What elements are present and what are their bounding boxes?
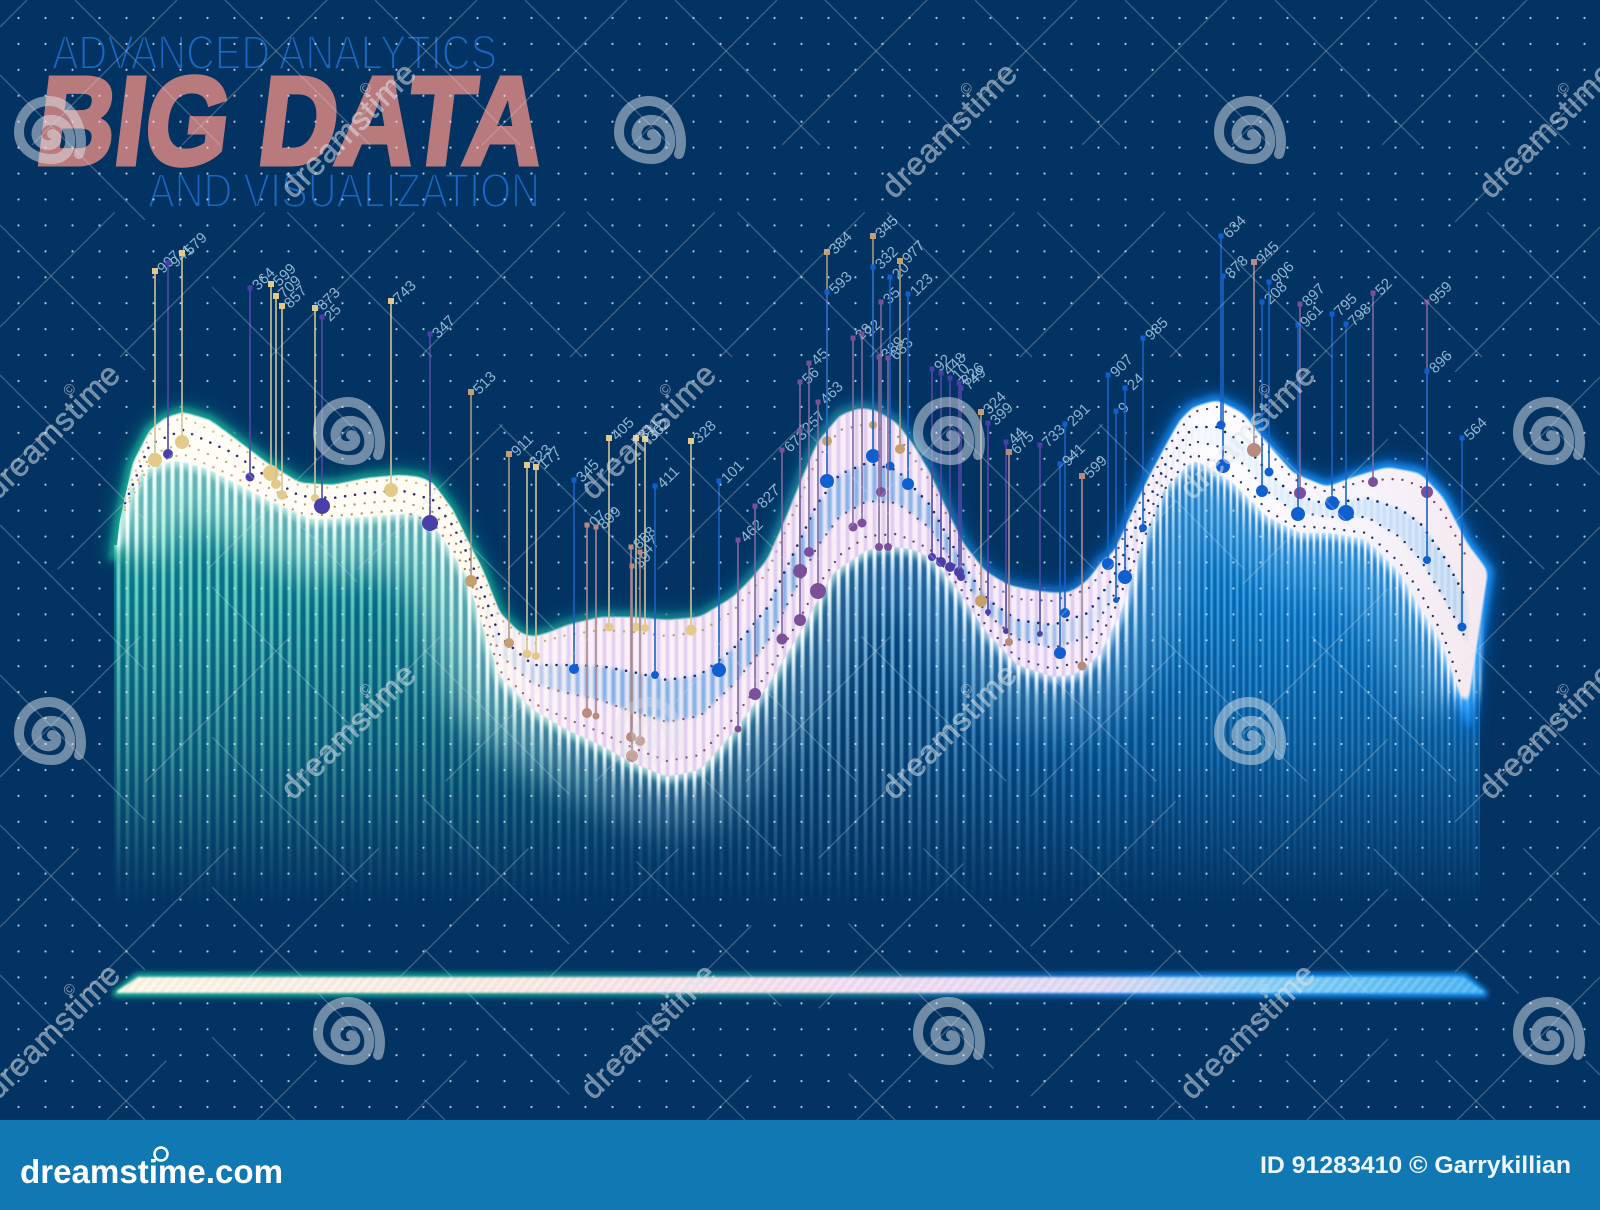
pin 899 xyxy=(592,503,625,720)
pin 985: 985 xyxy=(1142,314,1172,344)
pin 389: 389 xyxy=(878,333,908,363)
pin 873 xyxy=(311,284,344,502)
pin 906: 906 xyxy=(1268,258,1298,288)
pin 448 xyxy=(936,349,970,567)
pin 92: 92 xyxy=(931,351,955,375)
pin 92 xyxy=(928,351,955,561)
pin 35 xyxy=(876,284,904,497)
pin 941 lower: 941 xyxy=(1059,440,1089,470)
spiral xyxy=(1219,702,1281,760)
pin 579: 579 xyxy=(181,229,211,259)
pin 997 xyxy=(148,247,184,467)
pin 897: 897 xyxy=(1299,280,1329,310)
pin 291 xyxy=(1060,400,1094,618)
pin 24: 24 xyxy=(1124,370,1148,394)
pin 364 xyxy=(246,264,279,482)
pin 44 xyxy=(1003,424,1029,634)
pin 07 xyxy=(582,507,610,718)
pin 945: 945 xyxy=(1253,238,1283,268)
pin 743: 743 xyxy=(390,277,420,307)
pin 906 xyxy=(1264,258,1298,476)
pin 123: 123 xyxy=(907,270,937,300)
pin 448: 448 xyxy=(940,349,970,379)
pin 405: 405 xyxy=(608,414,638,444)
pin 302 xyxy=(641,415,674,632)
pin 513: 513 xyxy=(470,368,500,398)
pin 795: 795 xyxy=(1331,290,1361,320)
pin 749: 749 xyxy=(960,364,990,394)
pin 961: 961 xyxy=(1297,301,1327,331)
pin 20: 20 xyxy=(889,259,913,283)
bar chart: striped area under the curve xyxy=(114,466,1480,892)
pin 384: 384 xyxy=(826,228,856,258)
wordmark: dreamstime xyxy=(573,356,723,506)
pin 311 xyxy=(632,415,664,632)
pin 10: 10 xyxy=(949,360,973,384)
pin 07: 07 xyxy=(586,507,610,531)
pin 45: 45 xyxy=(808,345,832,369)
wordmark: © xyxy=(957,680,977,700)
pin 328: 328 xyxy=(690,417,720,447)
pin 593 xyxy=(820,268,856,488)
pin 208: 208 xyxy=(1261,278,1291,308)
pin 411 xyxy=(651,463,683,679)
pin 599 lower: 599 xyxy=(1081,452,1111,482)
pin 389 xyxy=(875,333,908,551)
pin 941 lower xyxy=(1054,440,1089,659)
wordmark: © xyxy=(1255,980,1275,1000)
spiral xyxy=(619,702,681,760)
spiral xyxy=(318,402,380,460)
pin 743 xyxy=(384,277,420,497)
wordmark: © xyxy=(356,680,376,700)
title line: advanced analytics: ADVANCED ANALYTICS xyxy=(52,27,497,80)
watermark spirals xyxy=(19,101,1580,1060)
spiral xyxy=(1518,402,1580,460)
dotted series 4 xyxy=(125,454,1462,761)
wordmark: dreamstime xyxy=(273,55,423,205)
pin 675 xyxy=(1005,428,1038,646)
pin 291: 291 xyxy=(1064,400,1094,430)
pin 941 xyxy=(163,241,197,459)
pin 44: 44 xyxy=(1005,424,1029,448)
pin 177: 177 xyxy=(535,443,565,473)
wordmark: © xyxy=(656,380,676,400)
spiral xyxy=(1219,101,1281,159)
pin 411: 411 xyxy=(654,463,683,492)
pin 345: 345 xyxy=(573,456,603,486)
pin 945 xyxy=(1247,238,1283,457)
pin 384 xyxy=(822,228,856,446)
pin 47 xyxy=(635,534,663,746)
pin 564 xyxy=(1458,414,1491,632)
pin 513 xyxy=(465,368,500,587)
pin 599 lower xyxy=(1078,452,1111,670)
pin 257: 257 xyxy=(799,407,829,437)
pin 345 xyxy=(569,456,603,674)
curve band: glowing ribbon with dotted series xyxy=(114,390,1488,790)
wordmark: © xyxy=(1554,79,1574,99)
pin 123 xyxy=(902,270,937,490)
dotted series 2 xyxy=(125,427,1467,680)
pin 10 xyxy=(945,360,973,572)
pin 826: 826 xyxy=(958,359,988,389)
pin 907: 907 xyxy=(1107,351,1137,381)
pin 733 xyxy=(1037,421,1069,637)
pin 985 xyxy=(1139,314,1172,532)
pin 347: 347 xyxy=(429,312,459,342)
pin 896 xyxy=(1423,347,1456,564)
pin 328 xyxy=(686,417,720,636)
pin 28 xyxy=(848,320,876,532)
dotted series 1 xyxy=(125,407,1467,644)
title block xyxy=(30,27,553,218)
data pins xyxy=(148,212,1491,762)
pin 826 xyxy=(954,359,988,577)
pin 599: 599 xyxy=(270,260,300,290)
spiral xyxy=(1518,1002,1580,1060)
pin 857 xyxy=(277,282,311,500)
pin 823 xyxy=(522,441,556,658)
pin 52: 52 xyxy=(1372,275,1396,299)
pin 827 xyxy=(749,482,784,700)
pin 733: 733 xyxy=(1039,421,1069,451)
pin 977: 977 xyxy=(899,237,929,267)
pin 857: 857 xyxy=(281,282,311,312)
pin 324 xyxy=(975,388,1010,607)
wordmark: dreamstime xyxy=(874,55,1024,205)
pin 798 xyxy=(1338,300,1375,521)
spiral xyxy=(918,1002,980,1060)
pin 579 xyxy=(175,229,211,449)
pin 208 xyxy=(1256,278,1291,497)
pin 24 xyxy=(1118,370,1148,584)
pin 675: 675 xyxy=(1008,428,1038,458)
wordmark: dreamstime xyxy=(1172,356,1322,506)
wordmark: dreamstime xyxy=(273,656,423,806)
pin 911: 911 xyxy=(508,431,537,460)
pin 257 xyxy=(794,407,829,626)
pin 997: 997 xyxy=(154,247,184,277)
pin 347 xyxy=(422,312,459,531)
pin 959: 959 xyxy=(1426,278,1456,308)
pin 683: 683 xyxy=(887,334,917,364)
spiral xyxy=(619,101,681,159)
pin 345 top xyxy=(869,212,902,429)
pin 399 xyxy=(985,399,1017,615)
pin 959 xyxy=(1421,278,1456,498)
pin 9 xyxy=(1113,399,1133,603)
wordmark: © xyxy=(1554,680,1574,700)
pin 463 xyxy=(810,378,847,599)
footer credit: ID 91283410 © Garrykillian xyxy=(1260,1152,1571,1179)
pin 977 xyxy=(895,237,929,454)
pin 878 xyxy=(1216,252,1252,473)
pin 873: 873 xyxy=(314,284,344,314)
pin 101: 101 xyxy=(718,457,748,487)
pin 25: 25 xyxy=(321,301,345,325)
pin 345 top: 345 xyxy=(872,212,902,242)
wordmark: © xyxy=(656,980,676,1000)
pin 332: 332 xyxy=(872,243,902,273)
pin 177 xyxy=(532,443,565,660)
pin 878: 878 xyxy=(1222,252,1252,282)
wordmark: dreamstime xyxy=(573,956,723,1106)
floor bar: glowing baseline strip xyxy=(115,975,1485,995)
pin 749 xyxy=(957,364,990,581)
wordmark: © xyxy=(1255,380,1275,400)
spiral xyxy=(318,1002,380,1060)
pin 634 xyxy=(1216,212,1250,430)
pin 899: 899 xyxy=(595,503,625,533)
pin 868 xyxy=(626,523,660,742)
pin 798: 798 xyxy=(1345,300,1375,330)
pin 634: 634 xyxy=(1220,212,1250,242)
pin 302: 302 xyxy=(644,415,674,445)
pin 463: 463 xyxy=(817,378,847,408)
spiral xyxy=(19,702,81,760)
pin 39 xyxy=(626,548,655,762)
pin 941: 941 xyxy=(167,241,197,271)
pin 823: 823 xyxy=(526,441,556,471)
pin 56 xyxy=(793,364,823,578)
pin 399: 399 xyxy=(987,399,1017,429)
pin 462: 462 xyxy=(737,516,767,546)
spiral xyxy=(918,402,980,460)
pin 324: 324 xyxy=(980,388,1010,418)
title line: and visualization: AND VISUALIZATION xyxy=(148,165,540,218)
pin 332 xyxy=(866,243,902,463)
pin 911 xyxy=(504,431,537,648)
pin 9: 9 xyxy=(1115,399,1133,417)
pin 101 xyxy=(712,457,748,677)
pin 868: 868 xyxy=(630,523,660,553)
wordmark: © xyxy=(957,79,977,99)
pin 896: 896 xyxy=(1426,347,1456,377)
pin 897 xyxy=(1294,280,1329,499)
pin 25 xyxy=(314,301,345,514)
pin 709 xyxy=(271,272,305,489)
pin 827: 827 xyxy=(754,482,784,512)
pin 311: 311 xyxy=(635,415,664,444)
pin 28: 28 xyxy=(852,320,876,344)
pin 35: 35 xyxy=(880,284,904,308)
wordmark: © xyxy=(60,980,80,1000)
footer bar xyxy=(0,1120,1600,1210)
pin 462 xyxy=(734,516,767,732)
pin 22: 22 xyxy=(861,316,885,340)
footer logo spiral xyxy=(154,1148,168,1160)
pin 52 xyxy=(1368,275,1396,487)
pin 45 xyxy=(804,345,832,557)
wordmark: © xyxy=(60,380,80,400)
pin 405 xyxy=(604,414,638,632)
pin 20 xyxy=(886,259,913,470)
pin 364: 364 xyxy=(249,264,279,294)
wordmark: dreamstime xyxy=(874,656,1024,806)
pin 673 xyxy=(776,426,811,644)
pin 564: 564 xyxy=(1461,414,1491,444)
pin 709: 709 xyxy=(275,272,305,302)
pin 673: 673 xyxy=(781,426,811,456)
pin 961 xyxy=(1291,301,1327,521)
spiral xyxy=(19,101,81,159)
title: big data: BIG DATA xyxy=(30,50,553,191)
pin 56: 56 xyxy=(799,364,823,388)
pin 599 xyxy=(263,260,300,481)
wordmark: © xyxy=(356,79,376,99)
pin 683 xyxy=(884,334,917,551)
footer logo: dreamstime.com xyxy=(20,1153,283,1190)
pin 39: 39 xyxy=(631,548,655,572)
wordmark: dreamstime xyxy=(1172,956,1322,1106)
pin 47: 47 xyxy=(639,534,663,558)
pin 907 xyxy=(1102,351,1137,570)
dotted series 3 xyxy=(125,441,1467,722)
pin 22 xyxy=(858,316,885,528)
pin 795 xyxy=(1325,290,1361,510)
pin 593: 593 xyxy=(826,268,856,298)
